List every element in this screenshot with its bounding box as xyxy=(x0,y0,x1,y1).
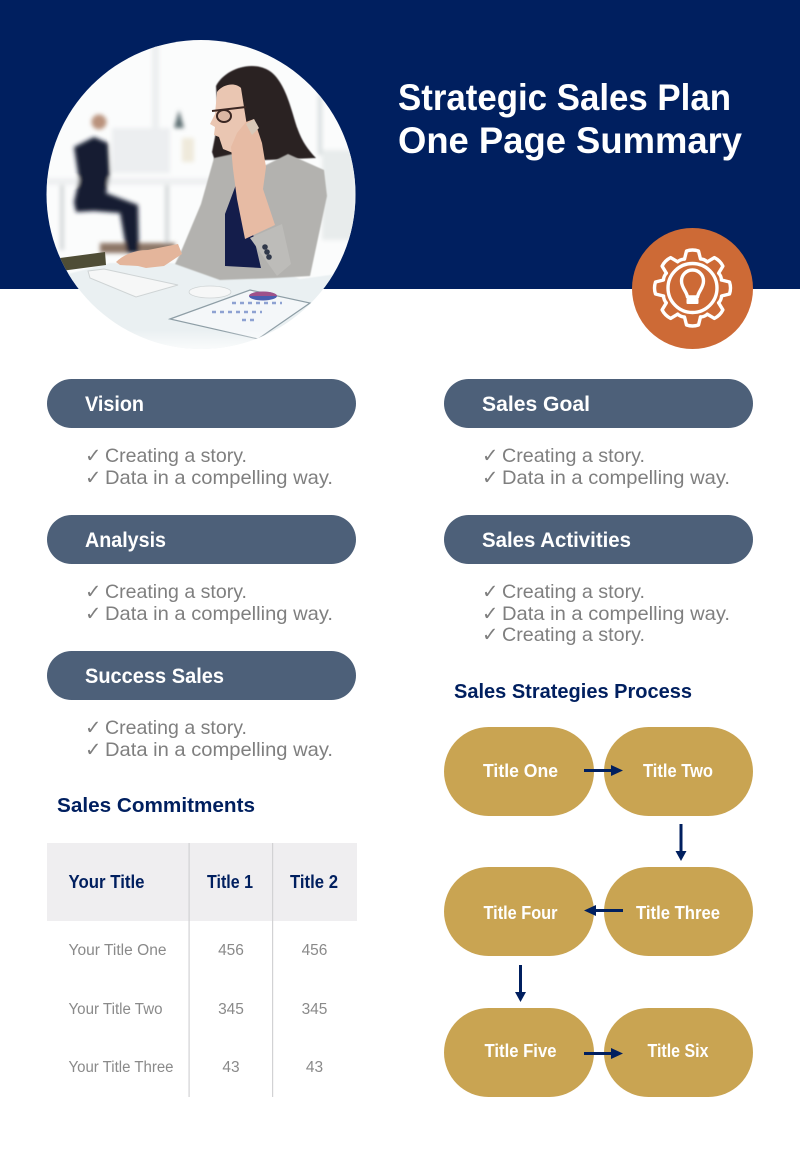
mouse xyxy=(189,286,231,298)
table: sales commitments: Your Title One xyxy=(68,942,166,959)
table: sales commitments: 345 xyxy=(302,1001,327,1018)
keyboard xyxy=(88,269,178,297)
process step: Title Two: Title Two xyxy=(643,761,713,781)
panel: Success Sales: Success Sales xyxy=(85,665,224,688)
panel: Sales Goal: Creating a story. xyxy=(502,445,645,467)
arrow: three to four xyxy=(584,905,623,916)
process step: Title Two xyxy=(604,727,753,816)
panel: Sales Goal xyxy=(444,379,753,489)
panel: Sales Activities: ✓ xyxy=(482,581,498,603)
panel: Success Sales: ✓ xyxy=(85,717,101,739)
panel: Sales Activities: Data in a compelling way. xyxy=(502,603,730,625)
panel: Analysis: ✓ xyxy=(85,603,101,625)
panel: Analysis xyxy=(47,515,356,625)
process step: Title Six: Title Six xyxy=(648,1041,708,1061)
hair back xyxy=(212,66,316,170)
title xyxy=(398,77,742,161)
panel: Vision: Creating a story. xyxy=(105,445,247,467)
arrow: five to six xyxy=(584,1048,623,1059)
panel: Vision: Data in a compelling way. xyxy=(105,467,333,489)
panel: Vision: ✓ xyxy=(85,445,101,467)
hand on keyboard xyxy=(116,244,182,268)
panel: Success Sales: ✓ xyxy=(85,739,101,761)
table: sales commitments: Your Title Three xyxy=(68,1059,174,1076)
process step: Title Four: Title Four xyxy=(484,903,558,923)
background man xyxy=(92,114,106,130)
panel: Analysis: ✓ xyxy=(85,581,101,603)
arrow: four to five xyxy=(515,965,526,1002)
panel: Analysis: Analysis xyxy=(85,529,166,552)
panel: Analysis: Creating a story. xyxy=(105,581,247,603)
table: sales commitments: Title 1 xyxy=(207,872,253,892)
panel: Success Sales: Data in a compelling way. xyxy=(105,739,333,761)
raised hand with phone xyxy=(231,119,275,239)
table: sales commitments: Your Title Two xyxy=(68,1001,162,1018)
table: sales commitments: Your Title xyxy=(68,872,144,892)
panel: Sales Activities xyxy=(444,515,753,646)
panel: Sales Goal: Data in a compelling way. xyxy=(502,467,730,489)
glasses xyxy=(212,107,246,111)
panel: Success Sales: Creating a story. xyxy=(105,717,247,739)
panel: Sales Goal: ✓ xyxy=(482,445,498,467)
clipboard chart xyxy=(170,290,310,339)
panel: Vision: Vision xyxy=(85,393,144,416)
panel: Success Sales xyxy=(47,651,356,761)
title: Strategic Sales Plan xyxy=(398,77,731,118)
panel: Sales Activities: Creating a story. xyxy=(502,624,645,646)
panel: Sales Goal: ✓ xyxy=(482,467,498,489)
panel: Sales Activities: Sales Activities xyxy=(482,529,631,552)
panel: Sales Goal: Sales Goal xyxy=(482,393,590,416)
process step: Title Three: Title Three xyxy=(636,903,720,923)
panel: Analysis: Data in a compelling way. xyxy=(105,603,333,625)
table: sales commitments: 345 xyxy=(218,1001,244,1018)
process step: Title Five: Title Five xyxy=(484,1041,556,1061)
table: sales commitments: 456 xyxy=(302,942,327,959)
table: sales commitments: 43 xyxy=(222,1059,240,1076)
title: One Page Summary xyxy=(398,120,742,161)
process step: Title One: Title One xyxy=(483,761,558,781)
panel: Sales Activities: ✓ xyxy=(482,603,498,625)
icon: gear with light bulb xyxy=(632,228,753,349)
table: sales commitments: 456 xyxy=(218,942,244,959)
table: sales commitments: 43 xyxy=(306,1059,323,1076)
process step: Title Six xyxy=(604,1008,753,1097)
photo: businesswoman on phone at desk xyxy=(46,40,356,346)
panel: Sales Activities: Creating a story. xyxy=(502,581,645,603)
heading: Sales Commitments: Sales Commitments xyxy=(57,794,255,817)
panel: Vision xyxy=(47,379,356,489)
process step: Title Five xyxy=(444,1008,594,1097)
header band xyxy=(0,0,800,289)
arrow: two to three xyxy=(676,824,686,861)
process step: Title One xyxy=(444,727,594,816)
face xyxy=(210,85,247,153)
arrow: one to two xyxy=(584,765,623,776)
cuff sleeve xyxy=(250,224,291,276)
heading: Sales Strategies Process: Sales Strategies Process xyxy=(454,680,692,703)
table: sales commitments xyxy=(47,843,357,1097)
desk xyxy=(68,263,334,343)
panel: Sales Activities: ✓ xyxy=(482,624,498,646)
process step: Title Three xyxy=(604,867,753,956)
process step: Title Four xyxy=(444,867,594,956)
table: sales commitments: Title 2 xyxy=(290,872,338,892)
woman blazer xyxy=(175,152,327,280)
panel: Vision: ✓ xyxy=(85,467,101,489)
